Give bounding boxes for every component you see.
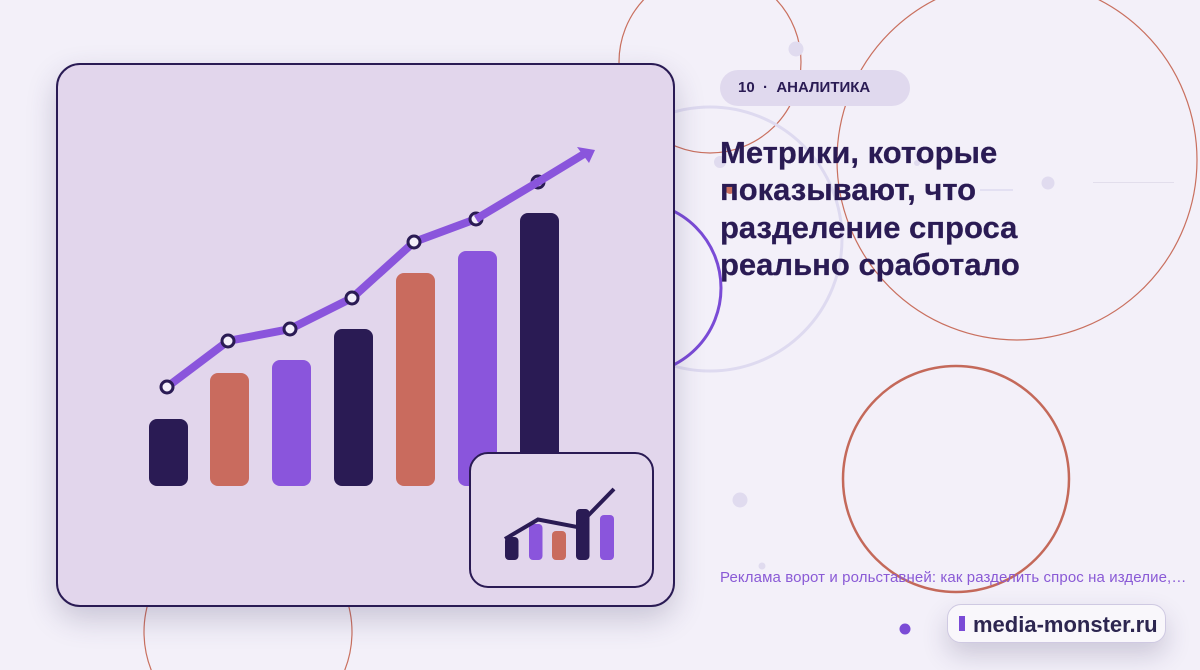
accent bar bbox=[959, 616, 965, 631]
trend line with markers and arrow bbox=[161, 147, 595, 393]
bar and line chart bbox=[149, 147, 654, 588]
category pill bbox=[720, 70, 910, 106]
title: разделение спроса bbox=[720, 210, 1017, 244]
title bbox=[720, 134, 1020, 282]
site name: media-monster.ru bbox=[973, 612, 1158, 637]
panel: chart card bbox=[56, 63, 675, 607]
inset mini chart bbox=[470, 453, 653, 587]
source caption: Реклама ворот и рольставней: как разделить спрос на изделие,… bbox=[720, 569, 1186, 586]
title: Метрики, которые bbox=[720, 134, 997, 170]
bars bbox=[149, 213, 559, 486]
category pill: 10 · АНАЛИТИКА bbox=[738, 79, 870, 96]
title: реально сработало bbox=[720, 247, 1020, 282]
site badge bbox=[947, 604, 1166, 643]
title: показывают, что bbox=[720, 172, 976, 207]
